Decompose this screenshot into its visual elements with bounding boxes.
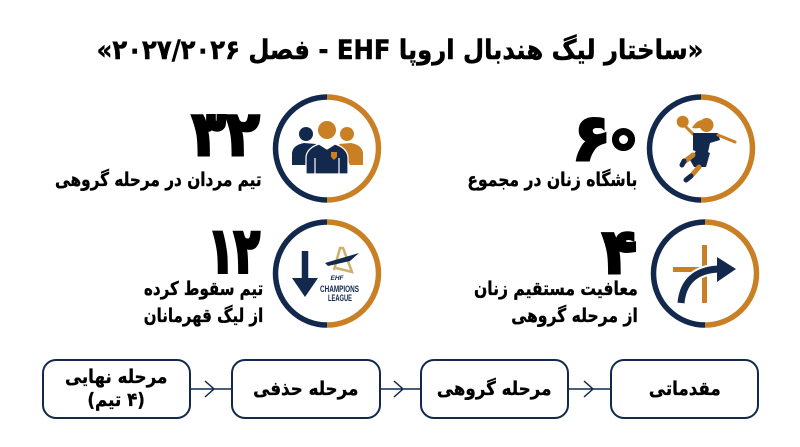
label 4: معافیت مستقیم زنان xyxy=(474,278,638,300)
icon: relegation from Champions League: CHAMPIONS xyxy=(320,284,359,295)
box: qualifying: مقدماتی xyxy=(649,378,720,400)
label 12 xyxy=(144,278,263,327)
title: «ساختار لیگ هندبال اروپا EHF - فصل ۲۰۲۷/۲۰۲۶» xyxy=(97,35,703,66)
arrow: final connector xyxy=(190,381,231,397)
box: group stage xyxy=(420,359,569,419)
icon: direct route arrow xyxy=(654,222,756,325)
stat: 60 women's clubs xyxy=(467,102,637,191)
box: knockout stage xyxy=(231,359,381,419)
label 4 xyxy=(474,278,638,327)
box: knockout stage: مرحله حذفی xyxy=(253,378,359,400)
stat: 12 relegated teams xyxy=(144,214,263,327)
label 32: تیم مردان در مرحله گروهی xyxy=(55,169,262,191)
stat: 32 men's teams xyxy=(55,97,262,191)
label 60: باشگاه زنان در مجموع xyxy=(467,169,637,191)
box: group stage: مرحله گروهی xyxy=(437,378,552,400)
label 4: از مرحله گروهی xyxy=(511,305,638,327)
box: final stage: (۴ تیم) xyxy=(88,389,145,411)
box: final stage xyxy=(42,359,191,419)
arrow: group connector xyxy=(568,381,610,397)
icon: relegation from Champions League: LEAGUE xyxy=(328,293,352,304)
number 12: ۱۲ xyxy=(209,214,260,287)
stat: 4 direct byes xyxy=(474,215,638,327)
box: qualifying xyxy=(610,359,759,419)
icon: team of three xyxy=(276,97,378,200)
icon: handball player xyxy=(650,97,752,200)
icon: relegation from Champions League: EHF xyxy=(330,275,345,282)
number 32: ۳۲ xyxy=(192,97,260,170)
icon: relegation from Champions League xyxy=(276,222,378,325)
label 12: تیم سقوط کرده xyxy=(144,278,263,300)
arrow: knockout connector xyxy=(380,381,420,397)
number 60 xyxy=(572,102,635,176)
number 4: ۴ xyxy=(602,215,637,288)
label 12: از لیگ قهرمانان xyxy=(144,305,263,327)
number 60: ۶ xyxy=(572,102,611,176)
box: final stage: مرحله نهایی xyxy=(65,366,168,388)
